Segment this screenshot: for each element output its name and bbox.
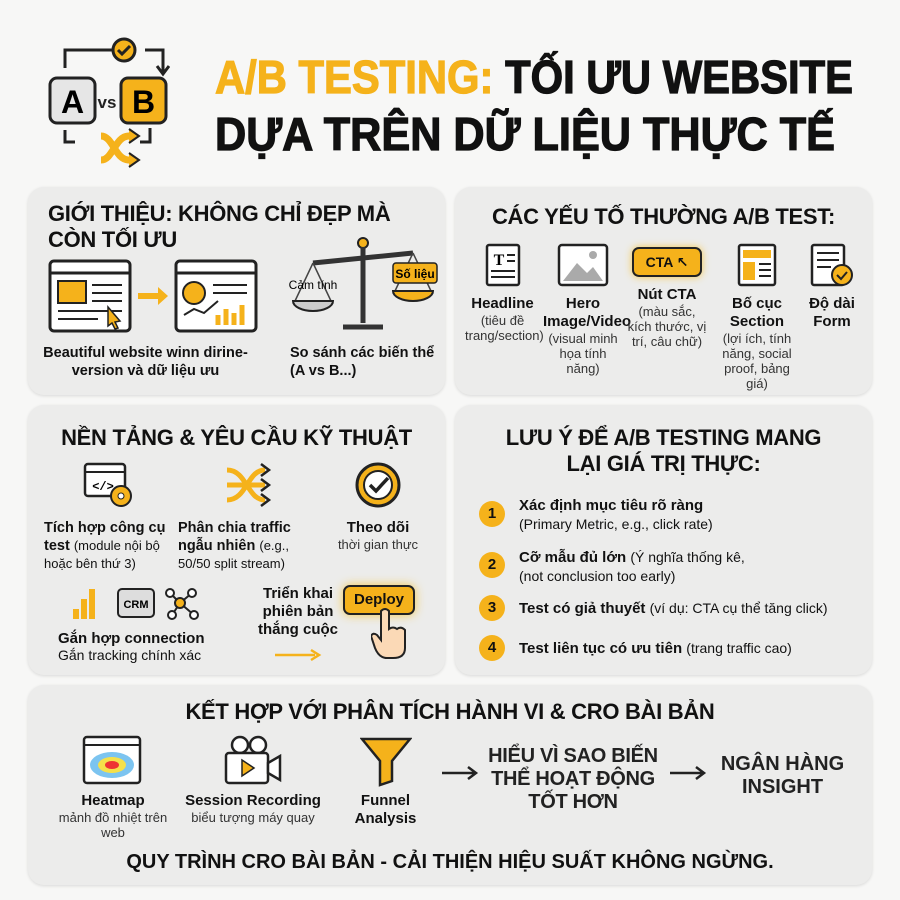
item: tích hợp công cụ (44, 462, 165, 571)
item: funnel (355, 738, 416, 827)
icon: deploy button (335, 577, 423, 659)
arrow (670, 766, 706, 780)
text: hiểu vì sao: TỐT HƠN (528, 791, 618, 813)
panel: lưu ý (455, 405, 872, 675)
item: heatmap: Heatmap (81, 792, 145, 809)
arrow (442, 766, 478, 780)
item: funnel: Analysis (355, 810, 416, 827)
text: ngân hàng insight (721, 752, 844, 798)
heading: LƯU Ý ĐỂ A/B TESTING MANG (506, 425, 821, 450)
item: headline: T (493, 252, 504, 269)
item 3: 3 (488, 599, 496, 616)
item: nút CTA: CTA ↖ (646, 254, 688, 270)
item: theo dõi: Theo dõi (347, 519, 409, 536)
title (215, 50, 853, 160)
item: theo dõi (338, 462, 418, 552)
title: DỰA TRÊN DỮ LIỆU THỰC TẾ (215, 108, 835, 160)
item: session recording: Session Recording (185, 792, 321, 809)
item: nút CTA (626, 240, 708, 349)
item: session recording (185, 736, 321, 825)
title: A/B TESTING: TỐI ƯU WEBSITE (215, 51, 853, 103)
item: độ dài form (809, 244, 855, 330)
item: tích hợp công cụ: </> (92, 480, 114, 494)
item 4: Test liên tục có ưu tiên (trang traffic cao) (519, 640, 792, 657)
item 2: (not conclusion too early) (519, 568, 675, 584)
item 3: Test có giả thuyết (ví dụ: CTA cụ thể tăng click) (519, 600, 828, 617)
header icon: A vs B (48, 38, 170, 168)
text: hiểu vì sao: HIỂU VÌ SAO BIẾN (488, 745, 658, 767)
item 1: Xác định mục tiêu rõ ràng (519, 497, 703, 514)
item: theo dõi: thời gian thực (338, 537, 418, 552)
item: phân chia traffic (178, 463, 291, 571)
icon: deploy button: Deploy (354, 591, 404, 608)
icon: scale: Cảm tính (289, 278, 337, 292)
header icon: A vs B: A (61, 84, 84, 120)
item 4: 4 (488, 639, 496, 656)
text: hiểu vì sao (488, 744, 658, 813)
item: headline: (tiêu đề trang/section) (465, 313, 544, 343)
text: ngân hàng insight: NGÂN HÀNG (721, 753, 844, 775)
item 3 (479, 595, 828, 621)
item: bố cục section: Bố cục Section (730, 295, 784, 330)
heading: GIỚI THIỆU: KHÔNG CHỈ ĐẸP MÀ (48, 201, 390, 226)
footer text: QUY TRÌNH CRO BÀI BẢN - CẢI THIỆN HIỆU SUẤT KHÔNG NGỪNG. (126, 851, 774, 873)
item: bố cục section (722, 244, 792, 391)
item: session recording: biểu tượng máy quay (191, 810, 315, 825)
item: headline (465, 244, 544, 343)
item 2: 2 (488, 556, 496, 573)
icons: connection (73, 588, 199, 620)
text: ngân hàng insight: INSIGHT (742, 776, 823, 798)
heading: LẠI GIÁ TRỊ THỰC: (566, 451, 761, 476)
item: phân chia traffic: Phân chia traffic ngẫu nhiên (e.g., 50/50 split stream) (178, 520, 291, 571)
item: tích hợp công cụ: Tích hợp công cụ test (module nội bộ hoặc bên thứ 3) (44, 520, 165, 571)
item: funnel: Funnel (361, 792, 410, 809)
item: hero image: (visual minh họa tính năng) (548, 331, 618, 376)
item 2: Cỡ mẫu đủ lớn (Ý nghĩa thống kê, (519, 549, 745, 566)
text: triển khai: Triển khai phiên bản thắng cuộc (258, 585, 338, 638)
text: so sánh: So sánh các biến thể (A vs B...) (290, 345, 434, 379)
heading: NỀN TẢNG & YÊU CẦU KỸ THUẬT (61, 425, 412, 450)
item 1 (479, 497, 713, 532)
text: hiểu vì sao: THỂ HOẠT ĐỘNG (491, 768, 655, 790)
item: bố cục section: (lợi ích, tính năng, social proof, bảng giá) (722, 331, 792, 391)
header icon: A vs B: vs (98, 93, 116, 112)
heading (506, 424, 821, 476)
panel: các yếu tố (455, 187, 872, 395)
text: gắn hợp connection: Gắn hợp connection (58, 630, 204, 647)
item: headline: Headline (471, 295, 534, 312)
panel: nền tảng (28, 405, 445, 675)
item: heatmap: mảnh đồ nhiệt trên web (59, 810, 167, 840)
panel: giới thiệu (28, 187, 445, 395)
icon: scale: Số liệu (395, 267, 435, 281)
item 2 (479, 548, 745, 584)
item: hero image (543, 244, 631, 376)
text: gắn hợp connection (58, 630, 204, 663)
item 1: 1 (488, 505, 496, 522)
item: hero image: Hero Image/Video (543, 295, 631, 330)
icons: connection: CRM (123, 599, 149, 611)
arrow (275, 649, 322, 661)
item: heatmap (59, 736, 167, 840)
item 1: (Primary Metric, e.g., click rate) (519, 516, 713, 532)
panel: kết hợp (28, 685, 872, 885)
item: nút CTA: Nút CTA (638, 286, 696, 303)
heading: CÒN TỐI ƯU (48, 227, 177, 252)
heading: CÁC YẾU TỐ THƯỜNG A/B TEST: (492, 204, 835, 229)
item: nút CTA: (màu sắc, kích thước, vị trí, câu chữ) (628, 304, 706, 349)
heading: KẾT HỢP VỚI PHÂN TÍCH HÀNH VI & CRO BÀI BẢN (185, 699, 715, 724)
header icon: A vs B: B (132, 84, 155, 120)
item 4 (479, 635, 792, 661)
icon: website comparison (48, 260, 258, 332)
text: beautiful website: Beautiful website winn dirine-version và dữ liệu ưu (43, 345, 248, 379)
heading (48, 200, 390, 252)
text: gắn hợp connection: Gắn tracking chính xác (58, 647, 201, 663)
icon: scale (289, 237, 438, 330)
item: độ dài form: Độ dài Form (809, 295, 855, 330)
